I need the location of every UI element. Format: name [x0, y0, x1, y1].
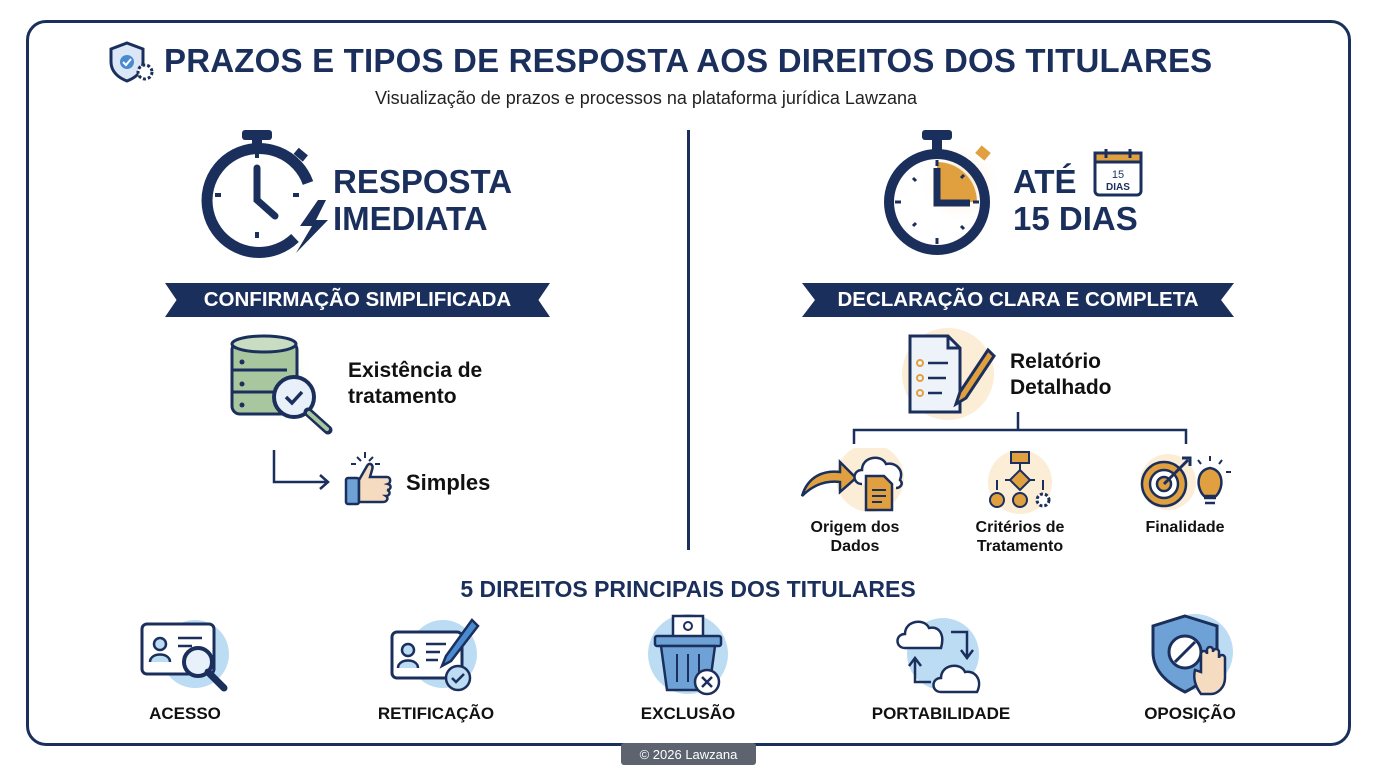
icon: finalidade	[1140, 454, 1231, 510]
label: criterios	[976, 519, 1064, 555]
banner: right	[802, 283, 1234, 317]
banner: left	[165, 283, 550, 317]
label: origem: Dados	[831, 538, 879, 555]
text: existencia: tratamento	[348, 385, 457, 408]
arrow	[272, 450, 330, 490]
heading: RESPOSTA	[333, 163, 512, 200]
icon: stopwatch lightning	[202, 130, 328, 258]
text: simples: Simples	[406, 470, 490, 495]
icon: shield gear	[110, 41, 154, 83]
text: existencia: Existência de	[348, 359, 482, 382]
text: existencia	[348, 359, 482, 408]
right: portabilidade: PORTABILIDADE	[872, 704, 1010, 723]
banner: left: CONFIRMAÇÃO SIMPLIFICADA	[204, 288, 511, 311]
right: exclusao: EXCLUSÃO	[641, 704, 735, 723]
icon: database check	[230, 334, 332, 434]
text: relatorio: Detalhado	[1010, 376, 1112, 399]
right: retificacao	[378, 618, 494, 723]
right: oposicao	[1144, 614, 1236, 723]
subtitle: Visualização de prazos e processos na plataforma jurídica Lawzana	[375, 88, 917, 108]
text: relatorio: Relatório	[1010, 350, 1101, 373]
icon: origem	[800, 448, 904, 512]
right: portabilidade	[872, 618, 1010, 723]
section heading: 5 direitos: 5 DIREITOS PRINCIPAIS DOS TITULARES	[460, 576, 916, 602]
label: finalidade: Finalidade	[1145, 519, 1225, 536]
icon: clock 15	[884, 130, 991, 255]
rights row	[140, 614, 1236, 723]
footer	[621, 743, 756, 765]
heading: IMEDIATA	[333, 200, 488, 237]
label: criterios: Tratamento	[977, 538, 1063, 555]
icon: calendar: DIAS	[1106, 182, 1130, 193]
icon: calendar: 15	[1112, 169, 1124, 181]
label: origem	[811, 519, 899, 555]
right: retificacao: RETIFICAÇÃO	[378, 704, 494, 723]
panel: right	[884, 130, 1142, 255]
icon: thumbs up	[344, 452, 392, 506]
icon: calendar	[1094, 149, 1142, 196]
panel: left	[202, 130, 512, 258]
right: acesso: ACESSO	[149, 704, 221, 723]
right: exclusao	[641, 614, 735, 723]
title: PRAZOS E TIPOS DE RESPOSTA AOS DIREITOS DOS TITULARES	[164, 42, 1212, 79]
heading	[333, 163, 512, 237]
label: criterios: Critérios de	[976, 519, 1064, 536]
heading	[1013, 163, 1138, 237]
heading: ATÉ	[1013, 163, 1077, 200]
divider	[687, 130, 690, 550]
right: acesso	[140, 620, 229, 723]
text: relatorio	[1010, 350, 1112, 399]
tree connector	[852, 412, 1188, 444]
label: origem: Origem dos	[811, 519, 899, 536]
right: oposicao: OPOSIÇÃO	[1144, 704, 1236, 723]
banner: right: DECLARAÇÃO CLARA E COMPLETA	[837, 288, 1198, 311]
footer: © 2026 Lawzana	[640, 746, 737, 762]
icon: report	[902, 328, 996, 420]
heading: 15 DIAS	[1013, 200, 1138, 237]
icon: criterios	[988, 450, 1052, 514]
